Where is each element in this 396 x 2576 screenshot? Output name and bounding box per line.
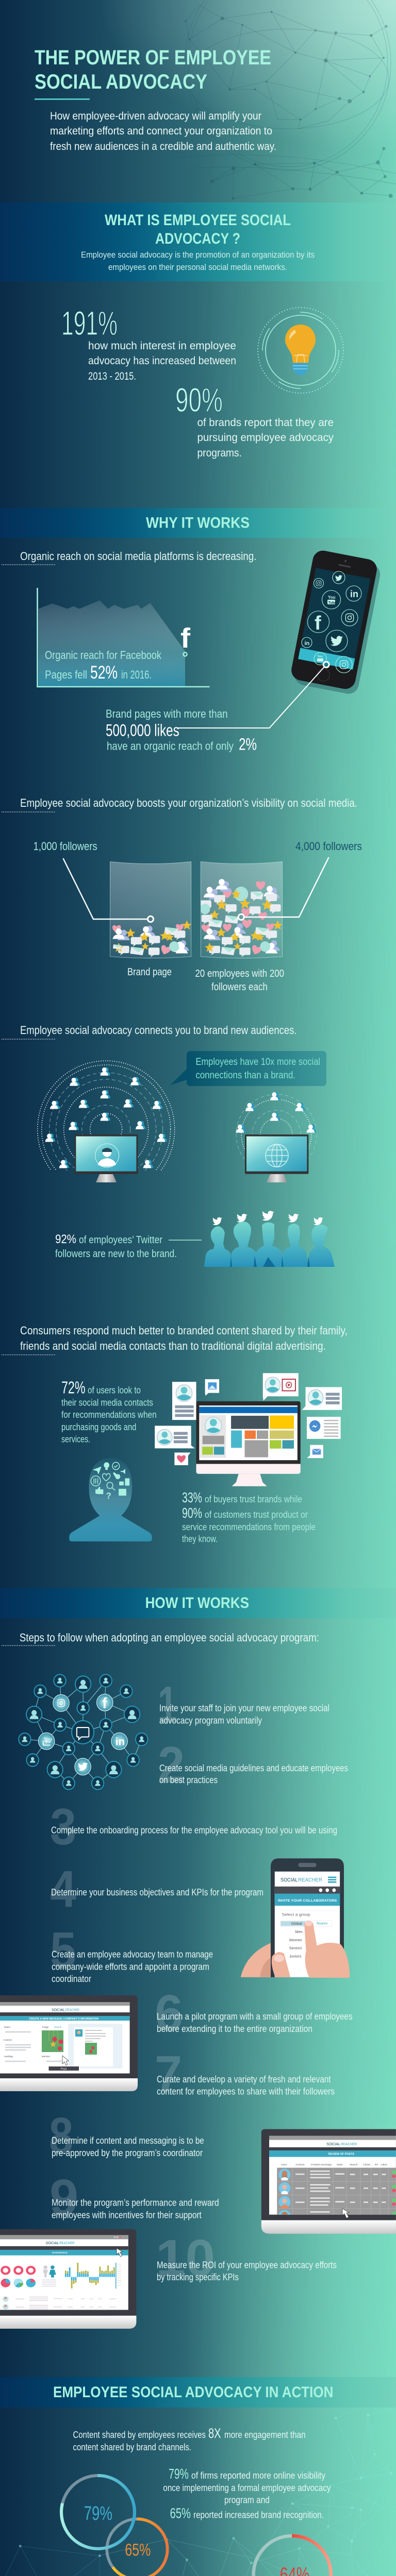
card: email bubble (307, 1445, 323, 1458)
icon: social hub network: in (116, 1736, 125, 1748)
jar labels (127, 967, 284, 993)
heading: what is employee social advocacy: WHAT IS EMPLOYEE SOCIAL (105, 212, 291, 229)
subheading: steps: Steps to follow when adopting an employee social advocacy program: (20, 1631, 319, 1644)
step 9 (50, 2169, 219, 2227)
background network: action section (0, 2408, 396, 2576)
text: 79% and 65%: once implementing a formal employee advocacy (163, 2482, 331, 2493)
stat: 191%: advocacy has increased between (88, 355, 236, 367)
stat: 92% twitter followers: followers are new to the brand. (55, 1248, 177, 1260)
subheading: consumers respond: Consumers respond much better to branded content shared by their family, (20, 1324, 348, 1337)
step 9: Monitor the program’s performance and reward (52, 2197, 219, 2208)
icon: laptop create message: Content (4, 2039, 12, 2041)
card: video bubble (263, 1373, 299, 1401)
icon: social hub network (19, 1674, 147, 1789)
icon: laptop review of posts: REVIEW OF POSTS (328, 2153, 354, 2156)
step 3: Complete the onboarding process for the employee advocacy tool you will be using (51, 1825, 337, 1836)
step 10 (156, 2229, 337, 2287)
card: messenger (307, 1417, 341, 1439)
card: profile bubble right (302, 1387, 342, 1410)
step 8: Determine if content and messaging is to be (52, 2135, 204, 2146)
stat: 191%: 2013 - 2015. (88, 370, 136, 382)
step 2: Create social media guidelines and educate employees (159, 1762, 348, 1773)
stat: 191%: how much interest in employee (88, 340, 236, 352)
icon: phone with social apps: Tube (328, 601, 337, 605)
text: 79% and 65%: 65% (170, 2505, 191, 2521)
label: 4,000 followers: 4,000 followers (295, 840, 362, 853)
step 8: pre-approved by the program’s coordinator (52, 2147, 203, 2158)
icon: phone with hands: Select a group (282, 1912, 310, 1917)
stat: 72% of users: purchasing goods and (61, 1422, 136, 1432)
icon: laptop review of posts: Posted message (311, 2163, 332, 2166)
intro text: marketing efforts and connect your organization to (50, 125, 272, 137)
icon: laptop statistics: SOCIAL (46, 2241, 59, 2245)
step 4 (50, 1860, 263, 1918)
icon: brand monitor (245, 1134, 308, 1182)
text: brand pages reach: 500,000 likes (106, 721, 179, 740)
subheading: consumers respond: friends and social media contacts than to traditional digital advertising. (20, 1340, 326, 1352)
chart caption: 52% (90, 663, 118, 683)
stat: 191%: 191% (61, 304, 118, 342)
icon: laptop review of posts: Date (337, 2163, 343, 2166)
step 1: advocacy program voluntarily (159, 1715, 262, 1725)
icon: laptop create message: CREATE A NEW MESSAGE | COMPANY’S INFORMATION (29, 2018, 98, 2021)
step 1 (158, 1676, 329, 1734)
text: 79% and 65%: of firms reported more online visibility (191, 2470, 326, 2481)
step 4: Determine your business objectives and KPIs for the program (51, 1887, 263, 1897)
icon: head with ideas (69, 1458, 152, 1541)
step 5: Create an employee advocacy team to manage (52, 1948, 213, 1960)
icon: phone with hands: Juniors (289, 1954, 302, 1959)
stat: 33% and 90% trust: service recommendations from people (182, 1522, 316, 1532)
text: 8x more engagement: more engagement than (224, 2429, 306, 2440)
icon: laptop statistics: STATISTICS (52, 2251, 68, 2255)
stat: 191% (61, 304, 236, 382)
icon: laptop review of posts: Likes (381, 2163, 387, 2166)
text: 8x more engagement: Content shared by employees receives (73, 2429, 206, 2440)
icon: laptop review of posts: Actions (295, 2163, 305, 2166)
icon: laptop create message: Hashtag (4, 2055, 13, 2058)
stat: 72% of users: 72% (61, 1378, 86, 1397)
ring chart: 64% (254, 2536, 331, 2576)
step 5: coordinator (52, 1973, 91, 1984)
jar: employees (200, 861, 283, 958)
icon: laptop create message: REACHER (65, 2007, 79, 2012)
card: image bubble (205, 1379, 219, 1396)
icon: phone with social apps: You (328, 595, 336, 600)
icon: phone with hands (241, 1858, 350, 1978)
icon: laptop review of posts: Clicks (363, 2163, 370, 2166)
step 2: 2 (158, 1736, 185, 1794)
panel: what is band (0, 202, 396, 281)
jar labels: Brand page (127, 967, 172, 978)
icon: social hub network: You (44, 1736, 52, 1742)
icon: laptop create message: Name (4, 2026, 11, 2028)
definition text: Employee social advocacy is the promotion of an organization by its (81, 250, 315, 260)
stat: 33% and 90% trust: 90% (182, 1505, 202, 1521)
stat: 72% of users: of users look to (88, 1385, 141, 1396)
title: THE POWER OF EMPLOYEE (35, 46, 271, 69)
step 10: Measure the ROI of your employee advocacy efforts (157, 2260, 337, 2270)
step 10: 10 (156, 2229, 215, 2287)
definition text: employees on their personal social media networks. (108, 262, 287, 272)
heading: what is employee social advocacy (105, 212, 291, 247)
text: brand pages reach (106, 707, 257, 754)
stat: 33% and 90% trust: 33% (182, 1489, 202, 1505)
text: brand pages reach: Brand pages with more than (106, 707, 228, 720)
icon: laptop create message: Mention (42, 2055, 51, 2058)
jar: brand page (110, 861, 192, 958)
stat: 92% twitter followers: 92% (55, 1232, 76, 1246)
step 6: 6 (155, 1985, 183, 2042)
subheading: organic reach: Organic reach on social media platforms is decreasing. (20, 550, 257, 563)
desktop monitor (196, 1401, 301, 1486)
step 6: Launch a pilot program with a small group of employees (157, 2011, 353, 2022)
chart caption (45, 649, 162, 683)
icon: laptop review of posts: SOCIAL (326, 2142, 341, 2146)
step 1: 1 (158, 1676, 177, 1734)
icon: employee monitor (74, 1134, 138, 1182)
icon: laptop statistics: REACHER (59, 2241, 75, 2245)
stat: 33% and 90% trust (182, 1489, 316, 1544)
chart caption: in 2016. (121, 668, 152, 681)
heading band: why it works: WHY IT WORKS (146, 514, 250, 532)
icon: head with ideas: ? (106, 1491, 111, 1501)
step 1: Invite your staff to join your new employee social (159, 1702, 329, 1713)
stat: 90% (175, 381, 334, 459)
icon: phone with hands: Men (295, 1929, 303, 1934)
step 5 (50, 1922, 213, 1984)
step 5: 5 (50, 1922, 76, 1979)
callout: 10x more connections: connections than a brand. (196, 1070, 295, 1081)
icon: phone with social apps (289, 549, 383, 696)
text: 79% and 65%: 79% (169, 2466, 189, 2482)
icon: laptop create message: Post (61, 2068, 67, 2071)
icon: phone with social apps: f (315, 613, 321, 634)
icon: monitor with social cards (155, 1373, 342, 1486)
icon: social hub network: f (102, 1695, 107, 1711)
icon: phone with hands: SOCIAL (280, 1877, 298, 1883)
stat: 92% twitter followers (55, 1232, 202, 1260)
stat: 72% of users: for recommendations when (61, 1410, 157, 1420)
step 7: content for employees to share with their followers (157, 2086, 335, 2097)
intro text: fresh new audiences in a credible and authentic way. (50, 141, 276, 152)
card: profile (172, 1382, 196, 1420)
step 9: employees with incentives for their support (52, 2209, 202, 2220)
jar labels: followers each (211, 981, 268, 993)
icon: laptop review of posts: Reach (350, 2163, 358, 2166)
icon: phone with hands: Nuevo (317, 1921, 327, 1926)
stat: 90%: pursuing employee advocacy (197, 432, 334, 444)
ring chart: 65% (107, 2519, 168, 2576)
step 2 (158, 1736, 348, 1794)
icon: phone with social apps: in (350, 589, 358, 599)
ring chart: 79%: 79% (84, 2503, 112, 2524)
hero network sphere (177, 0, 396, 200)
icon: laptop review of posts: User (281, 2163, 287, 2166)
card: profile left (155, 1426, 195, 1448)
step 6 (155, 1985, 353, 2042)
icon: phone with hands: Global (291, 1921, 302, 1926)
step 8 (49, 2107, 204, 2165)
text: 79% and 65%: program and (224, 2495, 270, 2505)
title (35, 46, 271, 100)
icon: phone with hands: REACHER (298, 1877, 322, 1883)
label: 1,000 followers: 1,000 followers (34, 840, 97, 853)
icon: laptop review of posts: REACHER (341, 2142, 357, 2146)
ring chart: 79% (61, 2476, 135, 2549)
icon: phone with social apps: in (304, 640, 310, 647)
step 2: on best practices (159, 1774, 218, 1785)
step 5: company-wide efforts and appoint a program (52, 1961, 209, 1972)
step 9: 9 (50, 2169, 78, 2227)
stat: 90%: 90% (175, 381, 223, 419)
stat: 72% of users: their social media contacts (61, 1398, 153, 1408)
stat: 90%: programs. (197, 447, 242, 459)
network: employee connections (37, 1060, 175, 1182)
stat: 33% and 90% trust: of buyers trust brands while (205, 1494, 302, 1504)
text: 8x more engagement: content shared by brand channels. (73, 2442, 191, 2452)
heading band: why it works (0, 508, 396, 538)
jar labels: 20 employees with 200 (195, 968, 284, 979)
icon: laptop create message: Search (54, 2026, 62, 2028)
stat: 90%: of brands report that they are (197, 417, 334, 429)
step 7: 7 (155, 2045, 182, 2103)
heading band: employee social advocacy in action: EMPLOYEE SOCIAL ADVOCACY IN ACTION (53, 2384, 333, 2401)
stat: 33% and 90% trust: of customers trust product or (205, 1510, 308, 1520)
heading band: how it works (0, 1588, 396, 1618)
step 3: 3 (50, 1798, 76, 1856)
icon: laptop create message: SOCIAL (52, 2007, 65, 2012)
step 4: 4 (50, 1860, 76, 1918)
intro text: How employee-driven advocacy will amplify your (50, 110, 261, 122)
text: brand pages reach: have an organic reach of only (107, 740, 234, 753)
subheading: consumers respond (2, 1324, 348, 1355)
title: SOCIAL ADVOCACY (35, 71, 207, 93)
stat: 72% of users: services. (61, 1434, 90, 1445)
step 3 (50, 1798, 337, 1856)
card: heart bubble (174, 1452, 191, 1465)
icon: light bulb (258, 308, 343, 393)
step 8: 8 (49, 2107, 73, 2165)
icon: laptop create message (0, 1995, 138, 2091)
chart caption: Organic reach for Facebook (45, 649, 162, 662)
icon: laptop create message: Image (42, 2026, 49, 2028)
stat: 72% of users (61, 1378, 157, 1445)
icon: social hub network: Tube (43, 1742, 52, 1746)
icon: phone with hands: Women (289, 1938, 302, 1942)
ring chart: 65%: 65% (125, 2540, 151, 2560)
heading: what is employee social advocacy: ADVOCACY ? (155, 230, 240, 247)
callout line: phone to likes (177, 662, 329, 728)
icon: phone with hands: INVITE YOUR COLLABORATORS (278, 1899, 337, 1903)
text: 79% and 65% (163, 2466, 331, 2521)
area chart: facebook organic reach (37, 588, 209, 687)
icon: laptop review of posts: RT (375, 2163, 379, 2166)
step 7 (155, 2045, 335, 2103)
stat: 92% twitter followers: of employees’ Twitter (79, 1234, 162, 1246)
stat: 33% and 90% trust: they know. (182, 1534, 218, 1544)
subheading: new audiences: Employee social advocacy connects you to brand new audiences. (20, 1024, 296, 1037)
icon: employees with twitter birds (204, 1211, 335, 1267)
step 6: before extending it to the entire organization (157, 2023, 312, 2034)
icon: laptop statistics (0, 2229, 136, 2329)
icon: laptop review of posts (261, 2129, 396, 2234)
icon: facebook f: f (180, 623, 191, 654)
callout: 10x more connections: Employees have 10x more social (196, 1056, 320, 1067)
icon: phone with hands: Seniors (289, 1946, 302, 1951)
text: brand pages reach: 2% (239, 735, 257, 754)
definition text (81, 250, 315, 272)
text: 79% and 65%: reported increased brand recognition. (193, 2510, 324, 2520)
callout lines: jars (63, 857, 329, 922)
intro text (50, 110, 276, 152)
network: brand connections (236, 1092, 317, 1182)
callout: 10x more connections (170, 1051, 326, 1086)
text: 8x more engagement (73, 2426, 306, 2452)
heading band: how it works: HOW IT WORKS (145, 1595, 249, 1612)
step 7: Curate and develop a variety of fresh and relevant (157, 2074, 331, 2084)
text: 8x more engagement: 8X (208, 2426, 221, 2441)
icon: phone with social apps: You (317, 655, 323, 658)
heading band: employee social advocacy in action (0, 2377, 396, 2408)
step 10: by tracking specific KPIs (157, 2272, 239, 2282)
chart caption: Pages fell (45, 668, 87, 681)
